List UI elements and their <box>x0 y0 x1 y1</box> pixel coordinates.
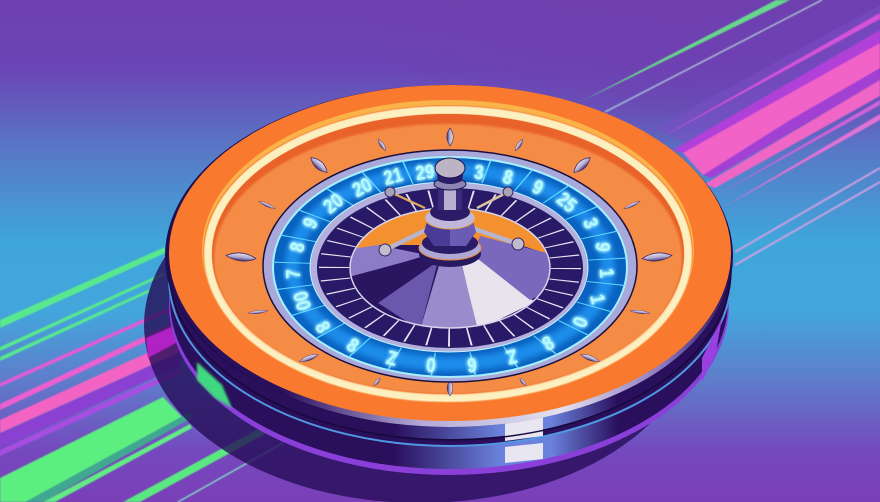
pocket numbers: 8 <box>343 333 363 357</box>
pocket numbers: 9 <box>298 214 322 232</box>
pocket numbers: 00 <box>289 289 315 313</box>
pocket numbers: 21 <box>381 163 405 189</box>
upper background purple haze <box>0 0 880 200</box>
wheel cast shadow <box>144 147 696 502</box>
orange gap inside yellow line <box>203 105 693 401</box>
wheel <box>165 85 733 475</box>
pocket numbers: 8 <box>311 317 335 337</box>
wheel base layers <box>165 85 733 475</box>
pocket numbers: 1 <box>586 292 610 306</box>
pocket numbers: 7 <box>282 269 304 279</box>
pocket numbers: 0 <box>426 353 436 377</box>
outer grey track <box>263 150 637 382</box>
pocket numbers: 1 <box>595 267 619 279</box>
inner grey ring <box>310 182 588 352</box>
orange rim <box>169 85 731 421</box>
track frets <box>334 198 566 338</box>
pocket numbers: Z <box>384 346 400 370</box>
thin yellow rim line <box>202 100 694 400</box>
pocket numbers: 3 <box>579 215 603 231</box>
spindle arms <box>379 187 524 256</box>
magenta reflection in shadow <box>146 325 176 358</box>
pocket numbers: Z <box>504 345 520 369</box>
pocket numbers: 20 <box>319 188 347 218</box>
central spindle <box>419 158 481 267</box>
pocket numbers: 20 <box>348 173 376 201</box>
pocket numbers: 0 <box>568 314 592 330</box>
pocket numbers <box>282 159 619 377</box>
pocket numbers: 25 <box>552 187 582 217</box>
orange inner face <box>214 124 682 394</box>
cream glowing ring <box>208 110 688 398</box>
pocket numbers: 9 <box>591 241 615 253</box>
pocket numbers: 29 <box>414 159 436 185</box>
blue number ring <box>273 157 627 377</box>
pocket numbers: 8 <box>538 331 558 355</box>
central cone <box>349 208 551 329</box>
dark ball track <box>317 188 583 348</box>
light streaks lower left <box>0 247 283 502</box>
pocket numbers: 8 <box>285 240 309 254</box>
pocket numbers: 3 <box>473 160 485 184</box>
silver marker lenses <box>226 128 672 396</box>
light streaks upper right <box>580 0 880 265</box>
ring dividers <box>292 169 608 365</box>
pocket numbers: 8 <box>501 165 515 189</box>
blue ring glow <box>292 170 608 364</box>
pocket numbers: 9 <box>529 175 547 199</box>
inner face shade <box>212 114 684 394</box>
pocket numbers: 9 <box>467 353 477 377</box>
